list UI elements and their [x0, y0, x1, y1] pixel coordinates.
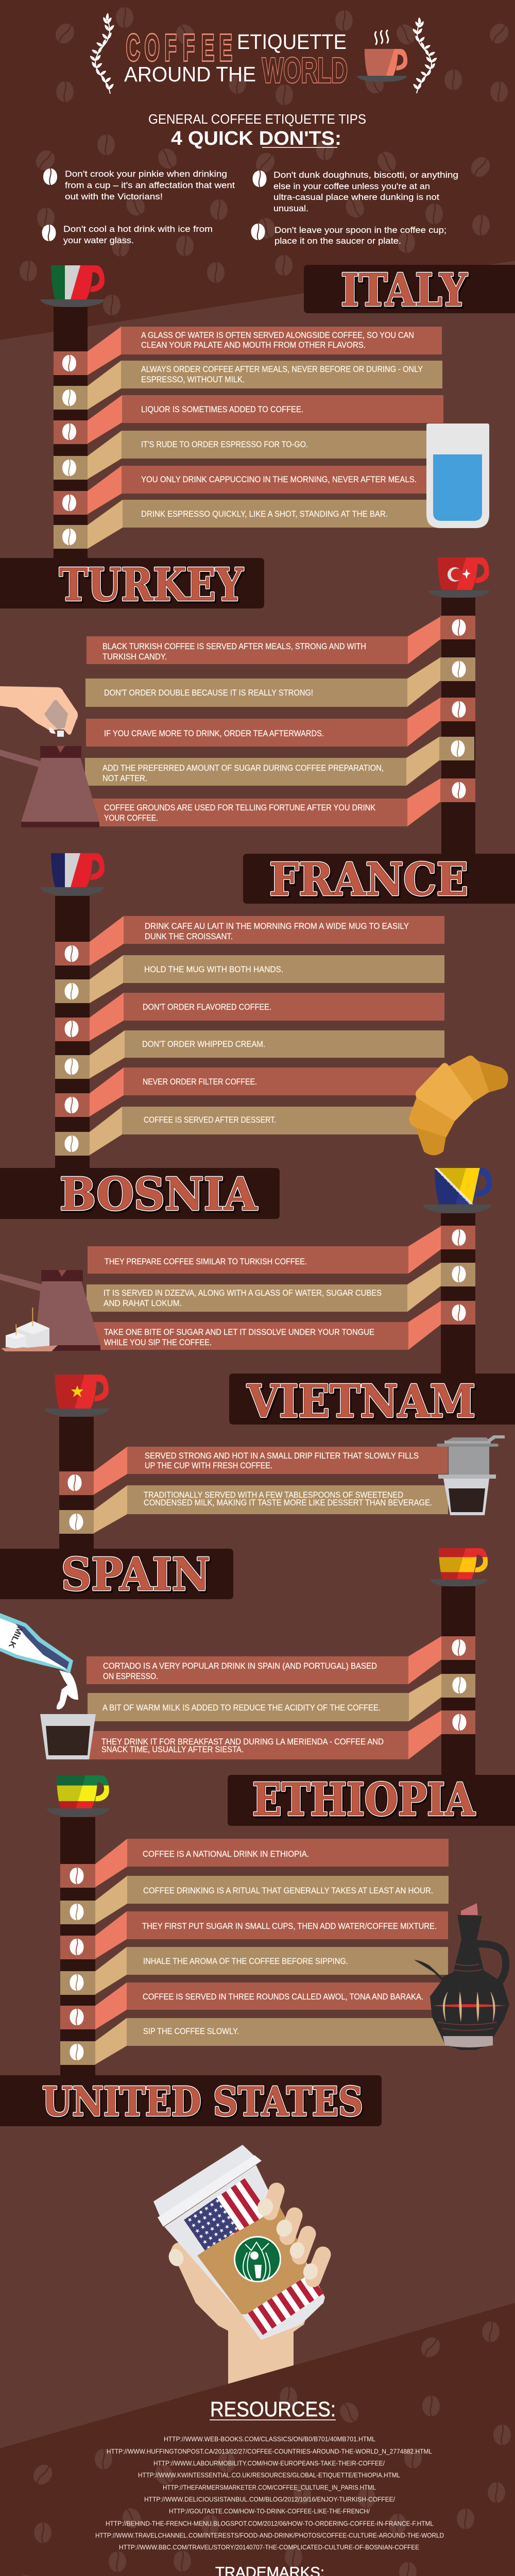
text block: resource links — [95, 2436, 444, 2551]
tip 6: COFFEE IS SERVED AFTER DESSERT. — [144, 1115, 276, 1125]
tip 2 — [87, 1263, 475, 1312]
tip 3: SNACK TIME, USUALLY AFTER SIESTA. — [101, 1745, 244, 1754]
text block: resource links: HTTP://WWW.HUFFINGTONPOST.CA/2013/02/27/COFFEE-COUNTRIES-AROUND-THE-WORLD_N_2774882.HTML — [107, 2448, 432, 2455]
heading: general tips: GENERAL COFFEE ETIQUETTE TIPS — [148, 111, 366, 127]
text block: don't 3 — [42, 224, 213, 245]
tip 2 — [88, 1674, 475, 1721]
tip 4: INHALE THE AROMA OF THE COFFEE BEFORE SIPPING. — [143, 1957, 348, 1966]
country label: Ethiopia: ETHIOPIA — [252, 1774, 475, 1826]
icon: Italy cup — [40, 265, 105, 307]
icon: espresso glass — [40, 1714, 96, 1759]
tip 1: DRINK CAFE AU LAIT IN THE MORNING FROM A WIDE MUG TO EASILY — [145, 922, 409, 931]
section: Ethiopia — [47, 1774, 515, 2075]
text block: don't 1: out with the Victorians! — [65, 192, 163, 201]
tip 4: ADD THE PREFERRED AMOUNT OF SUGAR DURING COFFEE PREPARATION, — [102, 764, 384, 773]
text block: don't 2: ultra-casual place where dunking is not — [273, 192, 439, 202]
icon: jebena pot — [414, 1903, 509, 2050]
tip 3: DON'T ORDER FLAVORED COFFEE. — [143, 1003, 271, 1012]
tip 3: TAKE ONE BITE OF SUGAR AND LET IT DISSOLVE UNDER YOUR TONGUE — [104, 1328, 374, 1337]
tip 4: NOT AFTER. — [102, 774, 147, 783]
icon: drip filter and glass — [437, 1435, 505, 1515]
tip 5: YOUR COFFEE. — [104, 814, 158, 823]
icon: France cup — [40, 853, 105, 895]
section: United States — [0, 2075, 382, 2384]
tip 5: COFFEE GROUNDS ARE USED FOR TELLING FORTUNE AFTER YOU DRINK — [104, 803, 375, 812]
text block: resource links: HTTP://WWW.DELICIOUSISTANBUL.COM/BLOG/2012/10/16/ENJOY-TURKISH-COFFEE/ — [144, 2496, 396, 2503]
text block: resource links: HTTP://WWW.LABOURMOBILITY.COM/HOW-EUROPEANS-TAKE-THEIR-COFFEE/ — [153, 2460, 385, 2467]
pillar — [54, 307, 88, 558]
pillar — [59, 1417, 94, 1549]
country label: Italy: ITALY — [341, 264, 468, 316]
country label: Bosnia: BOSNIA — [61, 1171, 259, 1223]
tip 1: TURKISH CANDY. — [102, 652, 167, 662]
text block: resource links: HTTP://WWW.BBC.COM/TRAVEL/STORY/20140707-THE-COMPLICATED-CULTURE-OF-BOSNIAN-COFFEE — [119, 2544, 419, 2551]
tip 6: DRINK ESPRESSO QUICKLY, LIKE A SHOT, STANDING AT THE BAR. — [141, 510, 388, 519]
icon: right laurel — [411, 17, 438, 93]
text block: don't 1 — [43, 168, 235, 201]
Starbucks logo — [234, 2236, 281, 2282]
country label: Italy: ITALY — [342, 266, 469, 318]
section: Bosnia — [0, 1168, 492, 1374]
country label: Turkey: TURKEY — [59, 559, 244, 611]
tip 6 — [55, 1107, 444, 1156]
text block: don't 1: from a cup – it's an affectation that went — [65, 180, 235, 190]
text block: don't 3: your water glass. — [63, 235, 134, 245]
country label: Italy — [304, 264, 515, 318]
tip 3 — [54, 395, 443, 444]
tip 1: COFFEE IS A NATIONAL DRINK IN ETHIOPIA. — [143, 1850, 309, 1859]
heading: general tips — [148, 111, 366, 149]
tip 1: CLEAN YOUR PALATE AND MOUTH FROM OTHER FLAVORS. — [141, 341, 366, 350]
text block: don't 4: place it on the saucer or plate. — [274, 236, 401, 246]
tip 1: DUNK THE CROISSANT. — [145, 932, 233, 941]
tip 4 — [85, 737, 474, 786]
country label: Vietnam: VIETNAM — [247, 1376, 475, 1428]
tip 3: LIQUOR IS SOMETIMES ADDED TO COFFEE. — [141, 405, 303, 414]
text block: don't 2 — [252, 170, 458, 213]
country label: Vietnam: VIETNAM — [247, 1376, 475, 1428]
tip 3: THEY FIRST PUT SUGAR IN SMALL CUPS, THEN ADD WATER/COFFEE MIXTURE. — [142, 1922, 437, 1931]
country label: France: FRANCE — [271, 856, 470, 908]
arm and palm — [169, 2243, 309, 2384]
cardboard sleeve — [197, 2206, 307, 2314]
paper cup — [153, 2145, 325, 2340]
fingernails — [166, 2196, 320, 2281]
pillar — [55, 896, 90, 1168]
tip 2: COFFEE DRINKING IS A RITUAL THAT GENERALLY TAKES AT LEAST AN HOUR. — [143, 1886, 433, 1895]
section: Spain — [0, 1548, 488, 1775]
country label: Bosnia: BOSNIA — [60, 1168, 258, 1221]
country label: Bosnia: BOSNIA — [60, 1168, 258, 1221]
country label: Spain: SPAIN — [61, 1549, 210, 1601]
section: Turkey — [0, 557, 489, 854]
tip 2: HOLD THE MUG WITH BOTH HANDS. — [144, 965, 283, 974]
tip 5 — [60, 1982, 448, 2029]
tip 1: A GLASS OF WATER IS OFTEN SERVED ALONGSIDE COFFEE, SO YOU CAN — [141, 331, 414, 340]
tip 5: COFFEE IS SERVED IN THREE ROUNDS CALLED AWOL, TONA AND BARAKA. — [143, 1992, 423, 2002]
pillar — [441, 1213, 475, 1374]
text block: resource links: HTTP://THEFARMERSMARKETER.COM/COFFEE_CULTURE_IN_PARIS.HTML — [163, 2484, 376, 2492]
tip 5: YOU ONLY DRINK CAPPUCCINO IN THE MORNING, NEVER AFTER MEALS. — [141, 475, 417, 484]
country label: Bosnia — [0, 1168, 280, 1223]
pillar — [441, 1586, 475, 1775]
icon: Vietnam cup — [45, 1375, 109, 1417]
country label: France: FRANCE — [269, 854, 468, 906]
country label: Ethiopia: ETHIOPIA — [254, 1776, 477, 1828]
icon: Bosnia cup — [423, 1168, 492, 1213]
tip 4 — [60, 1947, 448, 1995]
tip 1: THEY PREPARE COFFEE SIMILAR TO TURKISH COFFEE. — [105, 1257, 307, 1266]
country label: Spain: SPAIN — [63, 1551, 212, 1603]
tip 4 — [54, 431, 443, 480]
tip 4 — [55, 1030, 444, 1079]
title: WORLD — [262, 50, 348, 90]
tip 5 — [54, 466, 443, 515]
tip 6 — [60, 2018, 448, 2065]
country label: Spain: SPAIN — [61, 1549, 210, 1601]
title: AROUND THE — [124, 62, 256, 86]
tip 1 — [87, 1636, 475, 1684]
pillar — [60, 1817, 95, 2075]
text block: resource links: HTTP://BEHIND-THE-FRENCH-MENU.BLOGSPOT.COM/2012/06/HOW-TO-ORDERING-COFFEE-IN-FRANCE-F.HTML — [106, 2520, 434, 2528]
icon: milk bottle pouring — [0, 1613, 78, 1709]
country label: France: FRANCE — [269, 854, 468, 906]
tip 5 — [55, 1067, 444, 1117]
tip 1: SERVED STRONG AND HOT IN A SMALL DRIP FILTER THAT SLOWLY FILLS — [145, 1451, 419, 1461]
tip 3: IF YOU CRAVE MORE TO DRINK, ORDER TEA AFTERWARDS. — [104, 729, 324, 738]
icon: sugar cubes with plate — [1, 1308, 58, 1351]
text block: don't 2: else in your coffee unless you're at an — [273, 181, 430, 191]
tip 1 — [60, 1839, 449, 1888]
icon: cezve pot — [0, 746, 99, 827]
text block: don't 4: Don't leave your spoon in the coffee cup; — [274, 225, 447, 235]
country label: Ethiopia: ETHIOPIA — [252, 1774, 475, 1826]
tip 2: IT IS SERVED IN DZEZVA, ALONG WITH A GLASS OF WATER, SUGAR CUBES — [104, 1289, 382, 1298]
tip 4: IT'S RUDE TO ORDER ESPRESSO FOR TO-GO. — [141, 440, 308, 449]
tip 1: ON ESPRESSO. — [103, 1672, 158, 1681]
text block: resource links: HTTP://WWW.WEB-BOOKS.COM/CLASSICS/ON/B0/B701/40MB701.HTML — [164, 2436, 375, 2443]
country label: Italy: ITALY — [341, 264, 468, 316]
tip 2: A BIT OF WARM MILK IS ADDED TO REDUCE THE ACIDITY OF THE COFFEE. — [102, 1703, 381, 1713]
tip 3 — [88, 1301, 475, 1350]
tip 3 — [86, 698, 475, 747]
tip 3 — [88, 1710, 475, 1759]
text block: don't 2: unusual. — [273, 204, 308, 213]
title: COFFEE — [126, 27, 232, 68]
icon: dzezva pot — [0, 1270, 100, 1351]
tip 1: CORTADO IS A VERY POPULAR DRINK IN SPAIN (AND PORTUGAL) BASED — [103, 1662, 377, 1671]
country label: Turkey: TURKEY — [59, 559, 244, 611]
country label: Vietnam: VIETNAM — [248, 1378, 477, 1430]
icon: milk bottle pouring: MILK — [7, 1625, 24, 1650]
section: Vietnam — [45, 1374, 515, 1549]
tip 2: AND RAHAT LOKUM. — [104, 1299, 182, 1308]
heading: general tips: 4 QUICK DON'TS: — [171, 128, 341, 149]
tip 1 — [59, 1447, 448, 1495]
tip 3: WHILE YOU SIP THE COFFEE. — [104, 1338, 212, 1347]
icon: hand with sugar cube — [0, 686, 78, 737]
icon: glass of water — [426, 423, 489, 528]
text block: don't 4 — [251, 224, 447, 246]
icon: left laurel — [89, 13, 115, 94]
illustration: hand holding Starbucks cup — [153, 2145, 325, 2384]
title: ETIQUETTE — [237, 30, 347, 54]
tip 1 — [55, 916, 444, 965]
title: WORLD — [262, 50, 348, 90]
text block: don't 1: Don't crook your pinkie when drinking — [65, 169, 227, 179]
tip 3: THEY DRINK IT FOR BREAKFAST AND DURING LA MERIENDA - COFFEE AND — [101, 1737, 384, 1747]
tip 1 — [54, 327, 442, 375]
pillar — [441, 598, 475, 854]
tip 1 — [87, 616, 475, 664]
icon: Ethiopia cup — [47, 1775, 109, 1817]
tip 2 — [54, 361, 442, 410]
tip 1: UP THE CUP WITH FRESH COFFEE. — [145, 1461, 272, 1470]
fingers — [270, 2191, 323, 2279]
section: France — [40, 853, 515, 1168]
icon: Turkey cup — [428, 557, 489, 598]
text block: resource links: HTTP://WWW.KWINTESSENTIAL.CO.UK/RESOURCES/GLOBAL-ETIQUETTE/ETHIOPIA.HTML — [138, 2472, 400, 2479]
icon: title coffee cup — [357, 30, 407, 82]
tip 5 — [86, 778, 475, 826]
tip 2 — [60, 1876, 449, 1924]
tip 2: ALWAYS ORDER COFFEE AFTER MEALS, NEVER BEFORE OR DURING - ONLY — [141, 365, 423, 374]
tip 4: DON'T ORDER WHIPPED CREAM. — [142, 1040, 265, 1049]
tip 3 — [60, 1911, 448, 1959]
tip 6 — [54, 500, 444, 549]
tip 1 — [88, 1226, 475, 1274]
icon: Spain cup — [430, 1548, 488, 1586]
tip 1: BLACK TURKISH COFFEE IS SERVED AFTER MEALS, STRONG AND WITH — [102, 642, 366, 651]
title — [124, 27, 348, 90]
tip 3 — [55, 993, 444, 1041]
text block: resource links: HTTP://WWW.TRAVELCHANNEL.COM/INTERESTS/FOOD-AND-DRINK/PHOTOS/COFFEE-CULTURE-AROUND-THE-WORLD — [95, 2532, 444, 2539]
country label: Spain — [0, 1549, 233, 1603]
tip 2 — [85, 657, 475, 707]
icon: croissant — [409, 1056, 507, 1155]
country label: United States: UNITED STATES — [42, 2079, 363, 2125]
country label: United States: UNITED STATES — [44, 2080, 365, 2127]
text block: resource links: HTTP://GOUTASTE.COM/HOW-TO-DRINK-COFFEE-LIKE-THE-FRENCH/ — [169, 2508, 370, 2515]
text block: don't 2: Don't dunk doughnuts, biscotti, or anything — [273, 170, 458, 180]
country label: Turkey: TURKEY — [61, 561, 245, 613]
text block: don't 3: Don't cool a hot drink with ice from — [63, 224, 213, 234]
section: Italy — [40, 264, 515, 558]
tip 6: SIP THE COFFEE SLOWLY. — [143, 2027, 239, 2036]
tip 2 — [59, 1485, 448, 1534]
tip 2 — [55, 955, 444, 1003]
tip 2: DON'T ORDER DOUBLE BECAUSE IT IS REALLY STRONG! — [104, 688, 313, 698]
country label: United States: UNITED STATES — [42, 2079, 363, 2125]
title: COFFEE — [126, 27, 232, 68]
heading: resources: RESOURCES: — [210, 2397, 336, 2421]
tip 5: NEVER ORDER FILTER COFFEE. — [143, 1077, 257, 1087]
flag on cup — [184, 2178, 323, 2335]
tip 2: ESPRESSO, WITHOUT MILK. — [141, 375, 245, 384]
tip 2: CONDENSED MILK, MAKING IT TASTE MORE LIKE DESSERT THAN BEVERAGE. — [144, 1498, 432, 1507]
tip 2: TRADITIONALLY SERVED WITH A FEW TABLESPOONS OF SWEETENED — [144, 1490, 403, 1500]
